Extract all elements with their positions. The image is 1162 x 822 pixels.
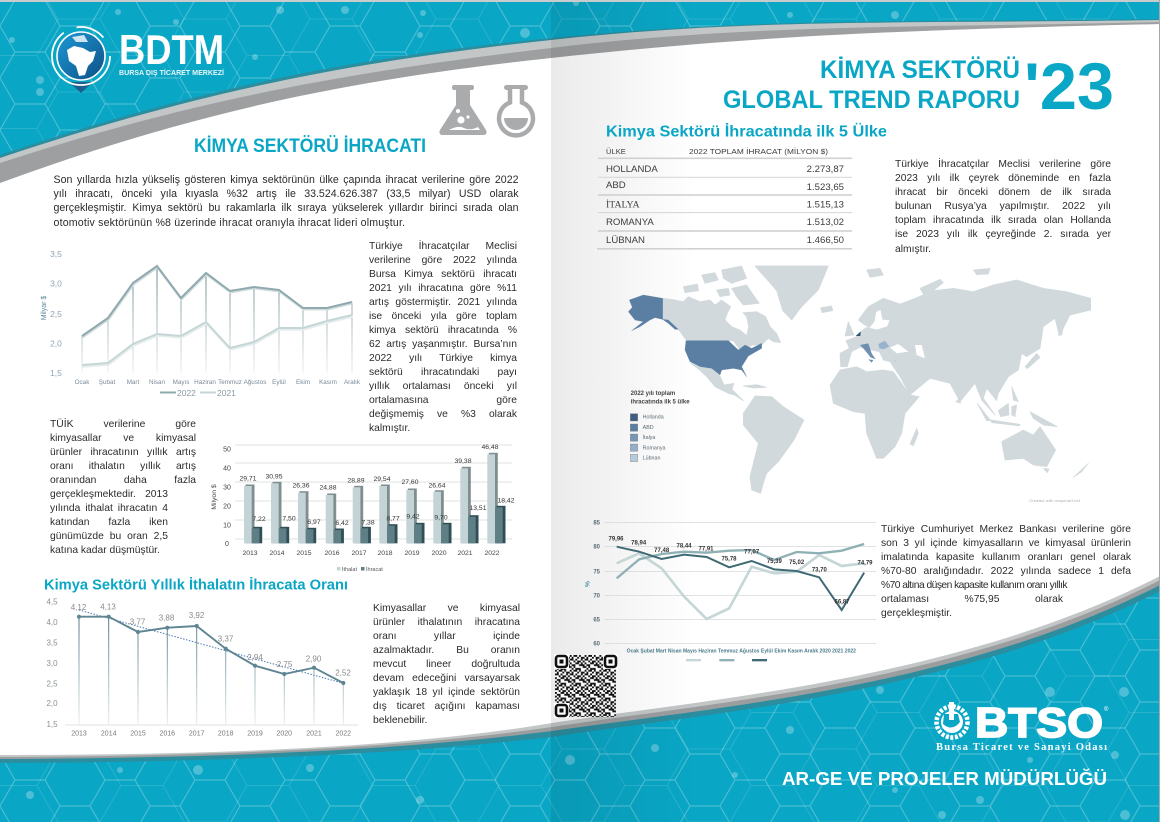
text block: capacity utilisation commentary: Türkiye Cumhuriyet Merkez Bankası verilerine göre bbox=[881, 524, 1131, 534]
line chart: import to export ratio: 1,5 bbox=[46, 720, 58, 729]
text block: Bursa chemical exports: ortalamasına göre bbox=[369, 394, 517, 406]
table: top five export countries: LÜBNAN bbox=[606, 235, 645, 246]
data labels: 13,51 bbox=[469, 505, 487, 512]
table: top five export countries: 1.515,13 bbox=[807, 200, 844, 210]
line chart: import to export ratio: 3,88 bbox=[159, 614, 175, 622]
text block: TÜİK imports and exports bbox=[50, 418, 196, 556]
line chart: import to export ratio: 2013 bbox=[71, 730, 87, 738]
table: top five export countries: İTALYA bbox=[606, 198, 640, 210]
text block: import to export ratio commentary: mevcut lineer doğrultuda bbox=[373, 659, 520, 670]
line chart: monthly Bursa chemical exports 2022 vs 2021: 2,0 bbox=[50, 338, 62, 348]
line chart: capacity utilisation 2020-2022: % bbox=[584, 581, 591, 587]
text block: Bursa chemical exports: 2022 yılı Türkiye kimya bbox=[369, 352, 517, 364]
line chart: monthly Bursa chemical exports 2022 vs 2021: Ocak bbox=[75, 379, 90, 386]
table: top five export countries bbox=[597, 147, 852, 250]
map legend: İtalya bbox=[643, 434, 655, 441]
data labels: 8,77 bbox=[386, 516, 400, 522]
title: Kimya Sektörü Global Trend Raporu '23: GLOBAL TREND RAPORU bbox=[723, 86, 1020, 114]
line chart: capacity utilisation 2020-2022: Ocak Şubat Mart Nisan Mayıs Haziran Temmuz Ağustos Eylül Ekim Kasım Aralık 2020 2021 2022 bbox=[627, 649, 856, 655]
text block: import to export ratio commentary: azalmaktadır. Bu oranın bbox=[373, 645, 520, 656]
text block: TÜİK imports and exports: katına kadar düşmüştür. bbox=[50, 545, 160, 556]
text block: Bursa chemical exports: artış göstermiştir. 2021 yılında bbox=[369, 296, 517, 308]
line chart: import to export ratio: 2020 bbox=[277, 730, 292, 738]
data labels: 30,95 bbox=[265, 474, 283, 480]
table: top five export countries: ÜLKE bbox=[606, 147, 626, 156]
line chart: import to export ratio: 2,94 bbox=[247, 653, 263, 662]
text block: capacity utilisation commentary bbox=[881, 524, 1131, 618]
data labels: 6,97 bbox=[307, 519, 321, 526]
data labels: 26,36 bbox=[292, 482, 310, 490]
bar chart: yearly chemical imports and exports: 40 bbox=[223, 466, 231, 472]
table: top five export countries: 1.513,02 bbox=[807, 217, 844, 228]
line chart: import to export ratio: 2,90 bbox=[306, 654, 322, 664]
text block: Bursa chemical exports: kimya sektörü ihracatında % bbox=[369, 324, 517, 336]
bar chart: yearly chemical imports and exports: Milyon $ bbox=[211, 484, 218, 510]
map: world map of top five export countries bbox=[628, 266, 1091, 503]
bar chart: yearly chemical imports and exports bbox=[211, 444, 515, 573]
map: world map of top five export countries: Created with mapchart.net bbox=[1029, 498, 1081, 503]
line chart: import to export ratio: 2,52 bbox=[335, 668, 351, 678]
table: top five export countries: 1.466,50 bbox=[807, 235, 844, 246]
legend: 2022 and 2021: 2022 bbox=[177, 388, 196, 398]
text block: 2023 first quarter exports: toplam ihracatında ilk sırada olan Hollanda bbox=[895, 215, 1111, 226]
line chart: import to export ratio: 2014 bbox=[101, 730, 117, 738]
line chart: capacity utilisation 2020-2022: 77,07 bbox=[744, 550, 760, 556]
bar chart: yearly chemical imports and exports: 2017 bbox=[351, 550, 367, 557]
line chart: import to export ratio: 3,5 bbox=[46, 638, 58, 648]
heading: Kimya Sektörü İhracatında ilk 5 Ülke: Kimya Sektörü İhracatında ilk 5 Ülke bbox=[606, 124, 887, 140]
text block: capacity utilisation commentary: ortalaması %75,95 olarak bbox=[881, 594, 1063, 604]
legend: imports and exports: İhracat bbox=[366, 566, 383, 573]
line chart: monthly Bursa chemical exports 2022 vs 2021: 3,0 bbox=[50, 278, 62, 288]
line chart: import to export ratio: 2022 bbox=[336, 730, 351, 738]
line chart: capacity utilisation 2020-2022: 80 bbox=[593, 545, 601, 551]
text block: 2023 first quarter exports: almıştır. bbox=[895, 244, 931, 255]
line chart: monthly Bursa chemical exports 2022 vs 2021: Milyar $ bbox=[41, 296, 48, 320]
line chart: import to export ratio: 2015 bbox=[130, 730, 146, 738]
data labels: 29,54 bbox=[373, 476, 391, 483]
line chart: monthly Bursa chemical exports 2022 vs 2021: 1,5 bbox=[50, 368, 62, 378]
title: Kimya Sektörü Global Trend Raporu '23: KİMYA SEKTÖRÜ bbox=[820, 55, 1020, 84]
icon: BTSO emblem bbox=[936, 702, 968, 738]
line chart: import to export ratio: 2016 bbox=[160, 730, 175, 738]
country: Italy bbox=[860, 343, 876, 363]
country: Romania bbox=[878, 341, 889, 349]
text block: chemical sector exports intro: yılı ihracatı, önceki yıla kıyasla %32 artış ile 33.524.626.387 (33,5 milyar) USD olarak bbox=[54, 188, 518, 200]
data labels: 29,71 bbox=[239, 476, 257, 482]
logo: BTSO bbox=[936, 699, 1109, 753]
map legend bbox=[630, 391, 690, 462]
map legend: 2022 yılı toplam bbox=[631, 391, 675, 397]
text block: Bursa chemical exports: 62 artış yaşanmıştır. Bursa’nın bbox=[369, 338, 517, 350]
line chart: import to export ratio: 2018 bbox=[218, 730, 234, 738]
line chart: capacity utilisation 2020-2022: 77,48 bbox=[654, 548, 670, 554]
text block: TÜİK imports and exports: günümüzde bu oran 2,5 bbox=[50, 531, 168, 542]
bar chart: yearly chemical imports and exports: 2022 bbox=[484, 550, 500, 557]
line chart: capacity utilisation 2020-2022: 73,70 bbox=[812, 567, 827, 573]
line chart: monthly Bursa chemical exports 2022 vs 2021: Nisan bbox=[149, 379, 166, 386]
bar chart: yearly chemical imports and exports: 2016 bbox=[324, 550, 340, 557]
line chart: monthly Bursa chemical exports 2022 vs 2021: Eylül bbox=[272, 379, 286, 386]
line chart: import to export ratio: 2019 bbox=[247, 730, 263, 738]
text block: 2023 first quarter exports: 2023 yılı ilk çeyrek döneminde en fazla bbox=[895, 173, 1111, 184]
line chart: import to export ratio: 2,0 bbox=[46, 699, 58, 708]
line chart: monthly Bursa chemical exports 2022 vs 2021: 2,5 bbox=[50, 309, 62, 319]
country: Lebanon bbox=[895, 360, 896, 363]
text block: chemical sector exports intro: Son yıllarda hızla yükseliş gösteren kimya sektörünün ülke çapında ihracat verilerine göre 2022 bbox=[54, 174, 518, 186]
table: top five export countries: ABD bbox=[606, 180, 626, 191]
bars: exports bbox=[252, 506, 506, 543]
logo: BDTM globe pin and wordmark: BURSA DIŞ TİCARET MERKEZİ bbox=[119, 68, 224, 77]
text block: capacity utilisation commentary: imalatında kapasite kullanım oranları genel olarak bbox=[881, 552, 1131, 562]
line chart: monthly Bursa chemical exports 2022 vs 2021: Mayıs bbox=[173, 379, 189, 386]
text block: TÜİK imports and exports: oranı ithalatın yıllık artış bbox=[50, 461, 196, 472]
logo: BTSO: BTSO bbox=[975, 699, 1103, 746]
text block: import to export ratio commentary: ürünler ithalatının ihracatına bbox=[373, 617, 520, 628]
icon: globe pin bbox=[52, 27, 110, 93]
line chart: capacity utilisation 2020-2022: 78,44 bbox=[677, 544, 692, 550]
bar chart: yearly chemical imports and exports: 2014 bbox=[269, 550, 285, 557]
data labels: 26,64 bbox=[428, 482, 446, 490]
line chart: capacity utilisation 2020-2022: 60 bbox=[593, 641, 601, 647]
line chart: capacity utilisation 2020-2022: 74,79 bbox=[858, 561, 873, 567]
text block: TÜİK imports and exports: katından fazla iken bbox=[50, 517, 168, 528]
text block: import to export ratio commentary: yaklaşık 18 yıl içinde sektörün bbox=[373, 687, 520, 698]
map legend: Hollanda bbox=[643, 415, 664, 421]
bar chart: yearly chemical imports and exports: 2018 bbox=[377, 550, 393, 557]
line chart: capacity utilisation 2020-2022: 66,87 bbox=[835, 600, 850, 606]
text block: import to export ratio commentary: Kimyasallar ve kimyasal bbox=[373, 602, 520, 614]
line chart: import to export ratio: 4,13 bbox=[100, 602, 116, 612]
line chart: import to export ratio: 2017 bbox=[189, 730, 205, 738]
QR code bbox=[554, 654, 618, 718]
legend: 2022 and 2021 bbox=[160, 388, 236, 398]
text block: 2023 first quarter exports bbox=[895, 158, 1111, 255]
text block: chemical sector exports intro: gerçekleşmiştir. Kimya sektörü bu rakamlarla ilk sıraya yükselerek yıllardır birinci sırada olan bbox=[54, 202, 518, 214]
data labels: 27,60 bbox=[401, 479, 419, 486]
text block: Bursa chemical exports: Türkiye İhracatçılar Meclisi bbox=[369, 240, 517, 252]
line chart: monthly Bursa chemical exports 2022 vs 2021: Kasım bbox=[319, 379, 337, 386]
text block: TÜİK imports and exports: gerçekleşmektedir. 2013 bbox=[50, 489, 168, 500]
legend: imports and exports: İthalat bbox=[342, 566, 357, 573]
text block: import to export ratio commentary: oranı yıllar içinde bbox=[373, 631, 520, 642]
text block: TÜİK imports and exports: kimyasallar ve kimyasal bbox=[50, 433, 196, 444]
text: AR-GE ve Projeler Müdürlüğü: AR-GE VE PROJELER MÜDÜRLÜĞÜ bbox=[782, 768, 1107, 789]
line chart: capacity utilisation 2020-2022: 85 bbox=[593, 520, 601, 526]
legend: imports and exports bbox=[337, 566, 383, 573]
map legend: Romanya bbox=[643, 445, 666, 451]
line chart: monthly Bursa chemical exports 2022 vs 2021 bbox=[41, 249, 361, 398]
data labels: 7,22 bbox=[252, 516, 266, 523]
data labels: 28,89 bbox=[347, 478, 365, 484]
line chart: capacity utilisation 2020-2022: 75 bbox=[593, 569, 601, 575]
logo: BDTM globe pin and wordmark bbox=[52, 26, 224, 93]
line chart: monthly Bursa chemical exports 2022 vs 2021: Aralık bbox=[344, 379, 361, 386]
line chart: capacity utilisation 2020-2022: 70 bbox=[593, 594, 601, 600]
data labels: 9,70 bbox=[434, 514, 448, 522]
data labels: 18,42 bbox=[497, 498, 515, 504]
text block: Bursa chemical exports bbox=[369, 240, 517, 434]
data labels bbox=[239, 444, 515, 527]
text block: 2023 first quarter exports: ise 2023 yılı ilk çeyreğinde 2. sırada yer bbox=[895, 229, 1111, 240]
map legend: Lübnan bbox=[643, 455, 660, 461]
line chart: import to export ratio: 2021 bbox=[306, 730, 322, 738]
text block: chemical sector exports intro: otomotiv sektörünün %8 üzerinde ihracat oranıyla ihracat lideri olmuştur. bbox=[54, 217, 405, 229]
line chart: monthly Bursa chemical exports 2022 vs 2021: Mart bbox=[127, 379, 140, 386]
data labels: 9,42 bbox=[406, 514, 420, 520]
line chart: import to export ratio bbox=[46, 598, 358, 738]
line chart: import to export ratio: 3,0 bbox=[46, 659, 58, 668]
line chart: capacity utilisation 2020-2022: 65 bbox=[593, 617, 601, 623]
heading: Kimya Sektörü Yıllık İthalatın İhracata Oranı: Kimya Sektörü Yıllık İthalatın İhracata Oranı bbox=[44, 576, 348, 594]
text block: capacity utilisation commentary: %70-80 aralığındadır. 2022 yılında sadece 1 defa bbox=[881, 566, 1131, 576]
data labels: 7,38 bbox=[361, 520, 375, 526]
text block: capacity utilisation commentary: son 3 yıl içinde kimyasalların ve kimyasal ürünlerin bbox=[881, 538, 1131, 548]
text block: 2023 first quarter exports: Türkiye İhracatçılar Meclisi verilerine göre bbox=[895, 158, 1111, 170]
text block: import to export ratio commentary bbox=[373, 602, 520, 726]
logo: BTSO: ® bbox=[1104, 706, 1109, 713]
text block: Bursa chemical exports: verilerine göre 2022 yılında bbox=[369, 254, 517, 266]
data labels: 7,50 bbox=[282, 516, 296, 522]
text block: 2023 first quarter exports: bulunan Rusya’ya yapılmıştır. 2022 yılı bbox=[895, 201, 1111, 212]
bar chart: yearly chemical imports and exports: 20 bbox=[223, 504, 231, 510]
text block: Bursa chemical exports: 2021 yılı ihracatına göre %11 bbox=[369, 282, 517, 294]
bar chart: yearly chemical imports and exports: 30 bbox=[223, 484, 231, 492]
text block: Bursa chemical exports: yıllık ortalaması önceki yıl bbox=[369, 380, 517, 392]
text block: Bursa chemical exports: değişmemiş ve %3 olarak bbox=[369, 408, 517, 420]
line chart: import to export ratio: 2,5 bbox=[46, 680, 58, 688]
bar chart: yearly chemical imports and exports: 0 bbox=[225, 541, 229, 548]
line chart: monthly Bursa chemical exports 2022 vs 2021: Ağustos bbox=[244, 379, 266, 386]
logo: BDTM globe pin and wordmark: BDTM bbox=[119, 26, 224, 73]
bar chart: yearly chemical imports and exports: 2020 bbox=[431, 550, 447, 557]
line chart: capacity utilisation 2020-2022 bbox=[584, 520, 876, 661]
text block: import to export ratio commentary: dış ticaret açığını kapaması bbox=[373, 701, 520, 712]
line chart: import to export ratio: 2,75 bbox=[277, 660, 293, 669]
line chart: monthly Bursa chemical exports 2022 vs 2021: Ekim bbox=[296, 379, 310, 386]
bar chart: yearly chemical imports and exports: 2013 bbox=[242, 550, 258, 557]
data labels: 39,38 bbox=[454, 458, 472, 465]
heading: Kimya Sektörü İhracatı: KİMYA SEKTÖRÜ İHRACATI bbox=[194, 134, 426, 157]
country: USA bbox=[628, 295, 762, 377]
text block: Bursa chemical exports: kalmıştır. bbox=[369, 422, 410, 434]
line chart: import to export ratio: 3,92 bbox=[189, 611, 205, 620]
line chart: capacity utilisation 2020-2022: 79,96 bbox=[609, 536, 624, 542]
text block: TÜİK imports and exports: ürünler ihracatının yıllık artış bbox=[50, 447, 196, 458]
text block: import to export ratio commentary: devam edeceğini varsayarsak bbox=[373, 673, 520, 684]
line chart: monthly Bursa chemical exports 2022 vs 2021: Temmuz bbox=[218, 379, 242, 386]
text block: TÜİK imports and exports: oranından daha fazla bbox=[50, 475, 196, 486]
table: top five export countries: 2.273,87 bbox=[807, 164, 844, 175]
title: Kimya Sektörü Global Trend Raporu '23: '23 bbox=[1024, 49, 1114, 123]
line chart: monthly Bursa chemical exports 2022 vs 2021: Şubat bbox=[99, 379, 115, 386]
line chart: import to export ratio: 3,37 bbox=[218, 634, 234, 644]
data labels: 46,48 bbox=[481, 444, 499, 451]
line chart: capacity utilisation 2020-2022: 75,39 bbox=[767, 559, 782, 565]
table: top five export countries: HOLLANDA bbox=[606, 164, 658, 175]
icon: round flask bbox=[499, 85, 533, 135]
bars: imports bbox=[244, 453, 498, 543]
text block: Bursa chemical exports: Bursa Kimya sektörü ihracatı bbox=[369, 268, 517, 280]
icon: conical flask bbox=[439, 85, 487, 135]
text block: TÜİK imports and exports: yılında ithalat ihracatın 4 bbox=[50, 503, 168, 514]
legend swatches bbox=[686, 659, 767, 661]
legend: 2022 and 2021: 2021 bbox=[217, 388, 236, 398]
text block: Bursa chemical exports: sektörü ihracatındaki payı bbox=[369, 366, 517, 378]
table: top five export countries: 1.523,65 bbox=[807, 182, 844, 193]
line chart: monthly Bursa chemical exports 2022 vs 2021: Haziran bbox=[194, 379, 216, 386]
text block: TÜİK imports and exports: TÜİK verilerine göre bbox=[50, 418, 196, 430]
country: Netherlands bbox=[856, 331, 861, 336]
text block: capacity utilisation commentary: gerçekleşmiştir. bbox=[881, 608, 952, 618]
title: Kimya Sektörü Global Trend Raporu '23 bbox=[723, 49, 1114, 123]
bar chart: yearly chemical imports and exports: 2021 bbox=[457, 550, 473, 557]
table: top five export countries: 2022 TOPLAM İHRACAT (MİLYON $) bbox=[689, 147, 829, 156]
map legend: ABD bbox=[643, 425, 654, 431]
line chart: capacity utilisation 2020-2022: 78,94 bbox=[631, 541, 647, 547]
text block: import to export ratio commentary: beklenebilir. bbox=[373, 715, 427, 726]
text block: 2023 first quarter exports: ihracat bir önceki dönem de ilk sırada bbox=[895, 187, 1111, 198]
bar chart: yearly chemical imports and exports: 2015 bbox=[296, 550, 312, 557]
text block: Bursa chemical exports: ise önceki yıla göre toplam bbox=[369, 310, 517, 322]
line chart: import to export ratio: 4,5 bbox=[46, 598, 58, 606]
logo: BTSO: Bursa Ticaret ve Sanayi Odası bbox=[936, 742, 1107, 753]
line chart: import to export ratio: 4,0 bbox=[46, 618, 58, 627]
line chart: import to export ratio: 4,12 bbox=[71, 603, 87, 612]
map legend: ihracatında ilk 5 ülke bbox=[631, 399, 690, 405]
bar chart: yearly chemical imports and exports: 50 bbox=[223, 446, 231, 454]
line chart: import to export ratio: 3,77 bbox=[130, 618, 146, 626]
line chart: capacity utilisation 2020-2022: 75,78 bbox=[722, 557, 737, 563]
data labels: 24,88 bbox=[319, 484, 337, 492]
bar chart: yearly chemical imports and exports: 2019 bbox=[404, 550, 420, 557]
line chart: monthly Bursa chemical exports 2022 vs 2021: 3,5 bbox=[50, 249, 62, 259]
text block: capacity utilisation commentary: %70 altına düşen kapasite kullanım oranı yıllık bbox=[881, 580, 1067, 590]
table: top five export countries: ROMANYA bbox=[606, 217, 654, 228]
text block: chemical sector exports intro bbox=[54, 174, 518, 229]
line chart: capacity utilisation 2020-2022: 77,91 bbox=[699, 546, 714, 552]
bar chart: yearly chemical imports and exports: 10 bbox=[223, 522, 231, 530]
line chart: capacity utilisation 2020-2022: 75,02 bbox=[789, 560, 805, 566]
data labels: 6,42 bbox=[335, 520, 349, 527]
